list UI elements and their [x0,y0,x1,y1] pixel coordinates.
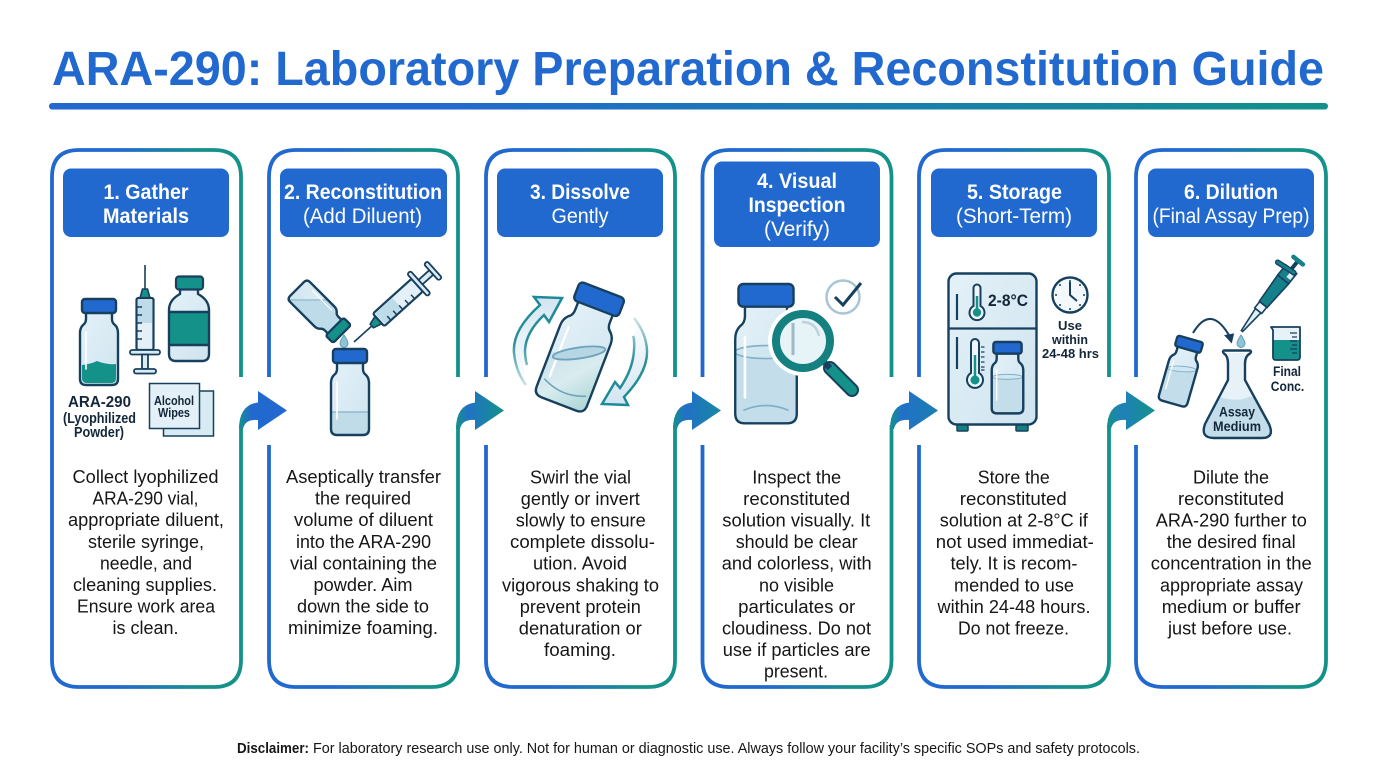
label: ARA-290 lyophilized powder: ARA-290 [68,394,131,411]
step description: particulates or [738,596,855,617]
step description: into the ARA-290 [296,531,431,552]
icon: rotation arrow right [602,318,647,405]
step header: 1. Gather [104,181,188,204]
step header: 4. Visual [757,170,837,193]
icon: diluent bottle [169,276,209,361]
step header: Inspection [748,194,846,217]
panel: step 6 dilution [1136,150,1326,687]
panel border [486,150,675,687]
title rule [49,103,1328,110]
label: use within 24-48 hrs: Use [1058,319,1082,333]
icon: tilted diluent vial [287,279,352,344]
label: use within 24-48 hrs: 24-48 hrs [1042,347,1099,361]
arrow: step 5 to 6 [1107,391,1155,430]
step description: no visible [759,574,834,595]
panel: step 1 gather materials [52,150,241,687]
panel border [269,150,458,687]
step description: just before use. [1167,618,1292,638]
label: final concentration: Final [1273,364,1301,379]
step description: appropriate diluent, [68,509,224,530]
icon: upper thermometer [970,285,984,320]
panel border [919,150,1109,687]
label: final concentration [1271,364,1304,394]
step description [502,466,659,660]
step description: down the side to [297,596,429,617]
step header: Materials [103,205,189,228]
icon: transfer arrow [1193,319,1234,342]
icon: tilted vial [1158,335,1205,408]
step header: 5. Storage [967,181,1062,204]
arrow: step 3 to 4 [673,391,721,430]
step description: vial containing the [290,552,437,573]
icon: flask: Assay [1219,404,1255,420]
icon: tilted vial [534,280,628,414]
step description: reconstituted [1178,488,1284,509]
panel: step 2 reconstitution [269,150,458,687]
step description: Dilute the [1193,466,1269,487]
step description [936,466,1094,638]
icon: inspection [735,280,861,423]
icon: syringe [130,265,160,374]
step description: Aseptically transfer [286,466,441,487]
icon: beaker [1271,327,1300,360]
disclaimer: For laboratory research use only. Not for human or diagnostic use. Always follow your facility’s specific SOPs and safety protocols. [313,741,1140,757]
step description: Ensure work area [77,596,216,617]
label: ARA-290 lyophilized powder: (Lyophilized [63,411,136,427]
step description: ution. Avoid [533,553,627,574]
icon: supplies [63,265,214,441]
icon: magnifying glass [768,306,852,390]
step description: solution visually. It [722,510,870,530]
icon: syringe [344,258,445,353]
icon: alcohol wipes [150,384,214,436]
step description: use if particles are [723,639,871,660]
step description [1151,466,1312,638]
step description: present. [764,661,828,682]
step description: sterile syringe, [88,531,204,552]
step description: foaming. [544,639,616,660]
step description: concentration in the [1151,553,1312,574]
step description: the desired final [1167,531,1296,552]
step description: cleaning supplies. [73,574,217,595]
icon: swirling vial [514,280,647,414]
step header: (Short-Term) [956,205,1072,228]
step description: should be clear [736,531,858,552]
step description: is clean. [112,617,178,638]
icon: stored vial [992,342,1023,413]
step header: (Verify) [764,218,830,241]
title: ARA-290: Laboratory Preparation & Reconstitution Guide [52,43,1324,96]
step header: (Final Assay Prep) [1152,205,1310,228]
icon: flask [1204,350,1271,438]
icon: alcohol wipes: Wipes [158,406,190,420]
step header [714,162,880,247]
disclaimer: Disclaimer: [237,741,309,757]
arrow: step 2 to 3 [456,391,504,430]
step description: Store the [978,466,1050,487]
step description: solution at 2-8°C if [940,510,1089,530]
step description: and colorless, with [722,553,872,574]
step description: reconstituted [743,488,850,509]
step header: 6. Dilution [1184,181,1278,204]
step description: ARA-290 vial, [92,488,198,509]
step description: volume of diluent [294,509,433,530]
step description: minimize foaming. [288,617,438,638]
icon: fridge [948,274,1036,431]
label: use within 24-48 hrs: within [1051,333,1088,347]
step description: needle, and [100,552,192,573]
panel border [1136,150,1326,687]
step header: 3. Dissolve [530,181,630,204]
icon: drop [1237,335,1245,348]
step description: vigorous shaking to [502,574,659,595]
step description: within 24-48 hours. [937,596,1090,617]
step description [286,466,441,638]
step header [280,168,447,237]
icon: receiving vial [331,349,369,435]
step description: medium or buffer [1162,596,1301,617]
step header: 2. Reconstitution [284,181,442,204]
step header: (Add Diluent) [303,205,422,228]
icon: clock [1052,278,1088,312]
panel: step 4 visual inspection [702,150,892,687]
step description: prevent protein [520,596,641,617]
step header [497,168,663,237]
icon: check mark badge [826,280,861,314]
step description: denaturation or [519,618,642,638]
step description: not used immediat- [936,531,1094,552]
icon: drop [340,335,348,348]
step header [63,168,229,237]
panel: step 5 storage [919,150,1109,687]
step description: mended to use [954,574,1074,595]
icon: refrigerator storage [948,274,1099,431]
step description: cloudiness. Do not [722,618,871,638]
icon: lyophilized vial [80,299,118,385]
label: ARA-290 lyophilized powder: Powder) [74,425,124,441]
icon: dilution [1158,251,1304,438]
step description: appropriate assay [1160,574,1304,595]
step description: tely. It is recom- [950,553,1078,574]
step description: ARA-290 further to [1156,510,1307,530]
icon: vial [735,284,797,423]
label: final concentration: Conc. [1271,379,1304,394]
step description: powder. Aim [314,574,412,595]
panel border [52,150,241,687]
icon: pipette [1230,251,1304,335]
step description: Inspect the [752,466,841,487]
step header [1148,168,1314,237]
step description: gently or invert [521,488,640,509]
arrow: step 1 to 2 [239,391,287,430]
label: ARA-290 lyophilized powder [63,394,136,441]
step description: reconstituted [960,488,1067,509]
icon: flask: Medium [1213,419,1261,434]
step header [931,168,1097,237]
step description: slowly to ensure [516,510,646,530]
step description: complete dissolu- [510,531,655,552]
label: temperature: 2-8°C [988,292,1028,310]
step header: Gently [552,205,609,228]
panel: step 3 dissolve [486,150,675,687]
icon: rotation arrow left [514,297,562,385]
label: use within 24-48 hrs [1042,319,1099,361]
step description: Swirl the vial [530,466,631,487]
icon: adding diluent [287,258,445,435]
step description: the required [315,488,411,509]
arrow: step 4 to 5 [890,391,938,430]
step description: Do not freeze. [958,618,1069,638]
icon: lower thermometer [967,339,984,388]
icon: alcohol wipes: Alcohol [154,394,194,408]
step description: Collect lyophilized [72,466,218,487]
panel border [702,150,892,687]
step description [722,466,872,682]
step description [68,466,224,638]
